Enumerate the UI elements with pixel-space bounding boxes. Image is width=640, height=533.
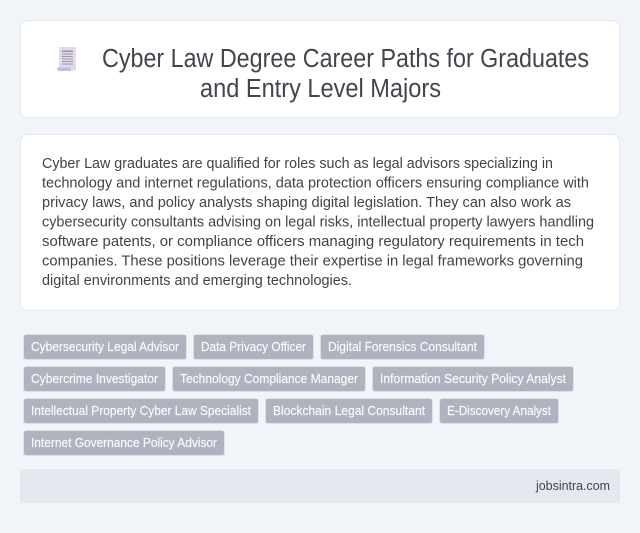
tag	[24, 398, 258, 424]
title: and Entry Level Majors	[200, 75, 441, 103]
footer bar	[20, 469, 620, 503]
tag: Data Privacy Officer	[201, 340, 307, 354]
description text: Cyber Law graduates are qualified for roles such as legal advisors specializing in	[42, 156, 553, 172]
description text: privacy laws, and policy analysts shaping digital legislation. They can also work as	[42, 195, 571, 211]
footer source: jobsintra.com	[535, 479, 610, 493]
tag	[24, 334, 186, 360]
description text: companies. These positions leverage their expertise in legal frameworks governing	[42, 254, 583, 270]
tag	[24, 366, 166, 392]
tag	[24, 430, 224, 456]
title	[102, 45, 589, 103]
tag: E-Discovery Analyst	[447, 404, 551, 418]
tag: Digital Forensics Consultant	[328, 340, 477, 354]
tag	[320, 334, 484, 360]
header panel	[20, 20, 620, 118]
tag: Technology Compliance Manager	[180, 372, 359, 386]
tag: Blockchain Legal Consultant	[273, 404, 425, 418]
tag	[172, 366, 366, 392]
description text: cybersecurity consultants advising on legal risks, intellectual property lawyers handling	[42, 214, 594, 230]
description text	[42, 156, 594, 289]
title: Cyber Law Degree Career Paths for Graduates	[102, 45, 589, 73]
tag: Information Security Policy Analyst	[380, 372, 566, 386]
tag	[266, 398, 432, 424]
tag: Internet Governance Policy Advisor	[31, 436, 218, 450]
panel: description	[20, 134, 620, 310]
tags: career paths	[24, 334, 574, 456]
tag	[440, 398, 558, 424]
description text: software patents, or compliance officers managing regulatory requirements in tech	[42, 234, 584, 250]
tag	[372, 366, 574, 392]
icon: document scroll	[57, 47, 76, 71]
tag: Cybersecurity Legal Advisor	[31, 340, 180, 354]
description text: technology and internet regulations, data protection officers ensuring compliance with	[42, 176, 589, 192]
tag: Intellectual Property Cyber Law Specialist	[31, 404, 251, 418]
tag: Cybercrime Investigator	[31, 372, 159, 386]
description text: digital environments and emerging technologies.	[42, 273, 352, 289]
tag	[194, 334, 314, 360]
